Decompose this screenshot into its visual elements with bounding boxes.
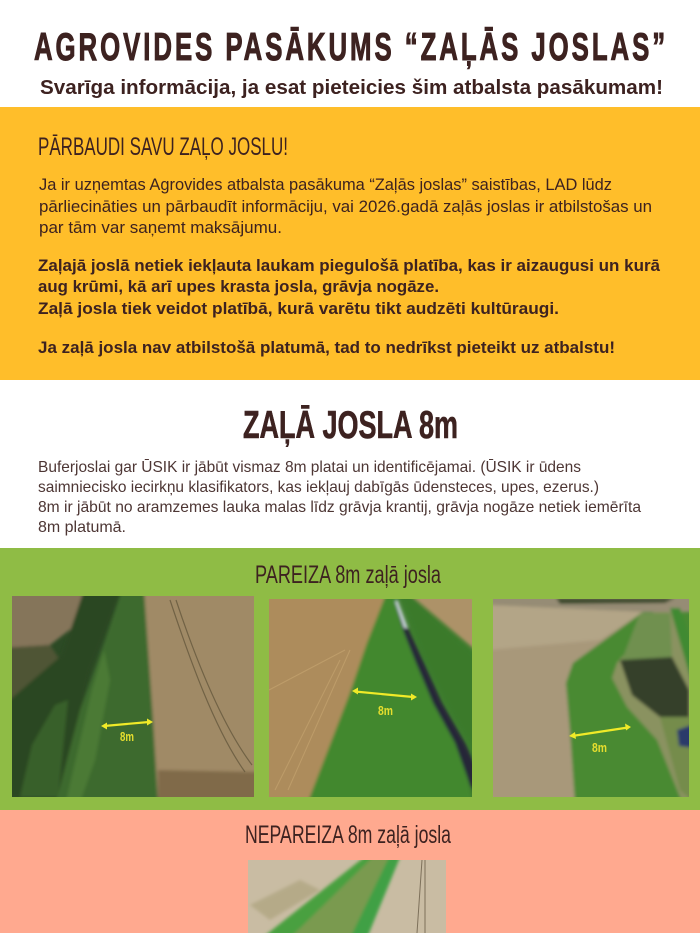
correct heading: PAREIZA 8m zaļā josla <box>255 561 441 589</box>
bold eligibility text: aug krūmi, kā arī upes krasta josla, grāvja nogāze. <box>38 278 439 296</box>
label: 8m: 8m <box>592 740 607 755</box>
panel heading: PĀRBAUDI SAVU ZAĻO JOSLU! <box>38 133 288 161</box>
intro paragraph: par tām var saņemt maksājumu. <box>39 219 282 237</box>
subtitle: Svarīga informācija, ja esat pieteicies šim atbalsta pasākumam! <box>40 77 663 99</box>
arrow: 8m width <box>352 688 417 700</box>
description paragraph: 8m ir jābūt no aramzemes lauka malas līdz grāvja krantij, grāvja nogāze netiek iemērīta <box>38 499 641 516</box>
panel: incorrect example <box>0 810 700 933</box>
bold warning: Ja zaļā josla nav atbilstošā platumā, tad to nedrīkst pieteikt uz atbalstu! <box>38 339 615 357</box>
section heading: ZAĻĀ JOSLA 8m <box>243 404 458 447</box>
description paragraph: saimniecisko iecirkņu klasifikators, kas iekļauj dabīgās ūdensteces, upes, ezerus.) <box>38 479 599 496</box>
panel: correct examples <box>0 548 700 810</box>
panel: 8m strip description <box>0 380 700 548</box>
label: 8m: 8m <box>378 703 393 718</box>
intro paragraph: pārliecināties un pārbaudīt informāciju, vai 2026.gadā zaļās joslas ir atbilstošas un <box>39 198 652 216</box>
panel: check your green strip <box>0 107 700 380</box>
description paragraph <box>38 458 641 536</box>
intro paragraph <box>39 176 652 237</box>
arrow: 8m width <box>101 718 153 730</box>
intro paragraph: Ja ir uzņemtas Agrovides atbalsta pasākuma “Zaļās joslas” saistības, LAD lūdz <box>39 176 612 194</box>
arrow: 8m width <box>569 724 631 739</box>
photo 1: wide strip beside shrubs <box>12 596 254 797</box>
description paragraph: 8m platumā. <box>38 519 126 536</box>
photo 2: strip beside ditch <box>269 599 472 797</box>
photo 4: incorrect strip <box>248 855 446 933</box>
header panel <box>0 0 700 107</box>
label: 8m: 8m <box>120 729 134 744</box>
description paragraph: Buferjoslai gar ŪSIK ir jābūt vismaz 8m platai un identificējamai. (ŪSIK ir ūdens <box>38 458 581 476</box>
photo 3: curved strip <box>488 594 694 802</box>
bold eligibility text: Zaļā josla tiek veidot platībā, kurā varētu tikt audzēti kultūraugi. <box>38 300 559 318</box>
incorrect heading: NEPAREIZA 8m zaļā josla <box>245 821 451 849</box>
bold eligibility text <box>38 257 661 318</box>
title: AGROVIDES PASĀKUMS “ZAĻĀS JOSLAS” <box>34 25 665 68</box>
bold eligibility text: Zaļajā joslā netiek iekļauta laukam piegulošā platība, kas ir aizaugusi un kurā <box>38 257 661 275</box>
